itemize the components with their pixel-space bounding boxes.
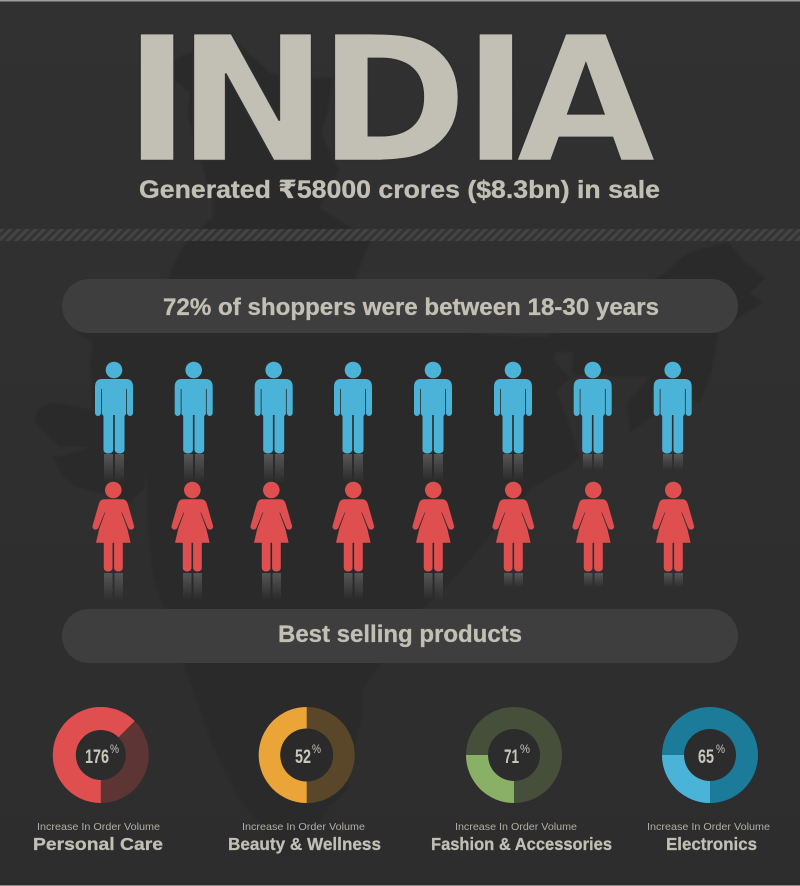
title: INDIA: INDIA — [123, 0, 656, 202]
row of female shopper icons — [92, 482, 694, 600]
panel: beauty and wellness: Beauty & Wellness — [228, 834, 381, 854]
donut chart: 71% — [466, 707, 562, 803]
banner: shopper age: 72% of shoppers were between 18-30 years — [163, 294, 659, 321]
donut chart: 52%: 52 — [295, 747, 311, 768]
donut chart: 176% — [53, 707, 149, 803]
panel: electronics: Increase In Order Volume — [647, 821, 770, 833]
panel: electronics: Electronics — [666, 834, 757, 854]
panel: fashion and accessories: Increase In Order Volume — [455, 821, 577, 833]
donut chart: 71%: % — [520, 742, 530, 756]
donut chart: 176%: % — [110, 742, 119, 756]
row of male shopper icons — [95, 362, 692, 483]
panel: personal care — [33, 707, 163, 854]
donut chart: 65% — [662, 707, 758, 803]
donut chart: 176%: 176 — [85, 747, 109, 768]
donut chart: 65%: % — [716, 742, 725, 756]
panel: personal care: Personal Care — [33, 834, 163, 854]
panel: fashion and accessories: Fashion & Accessories — [431, 834, 612, 854]
hatched divider band — [0, 229, 800, 241]
donut chart: 71%: 71 — [504, 747, 519, 768]
donut chart: 52%: % — [312, 742, 321, 756]
panel: beauty and wellness: Increase In Order Volume — [242, 821, 365, 833]
banner: best selling products — [62, 609, 738, 663]
panel: beauty and wellness — [228, 707, 381, 854]
panel: personal care: Increase In Order Volume — [37, 821, 160, 833]
donut chart: 52% — [259, 707, 355, 803]
panel: fashion and accessories — [431, 707, 612, 854]
panel: electronics — [647, 707, 770, 854]
subtitle: sales figure: Generated ₹58000 crores ($8.3bn) in sale — [139, 176, 660, 204]
donut chart: 65%: 65 — [698, 747, 714, 768]
banner: best selling products: Best selling products — [278, 621, 522, 648]
banner: shopper age — [62, 279, 738, 333]
